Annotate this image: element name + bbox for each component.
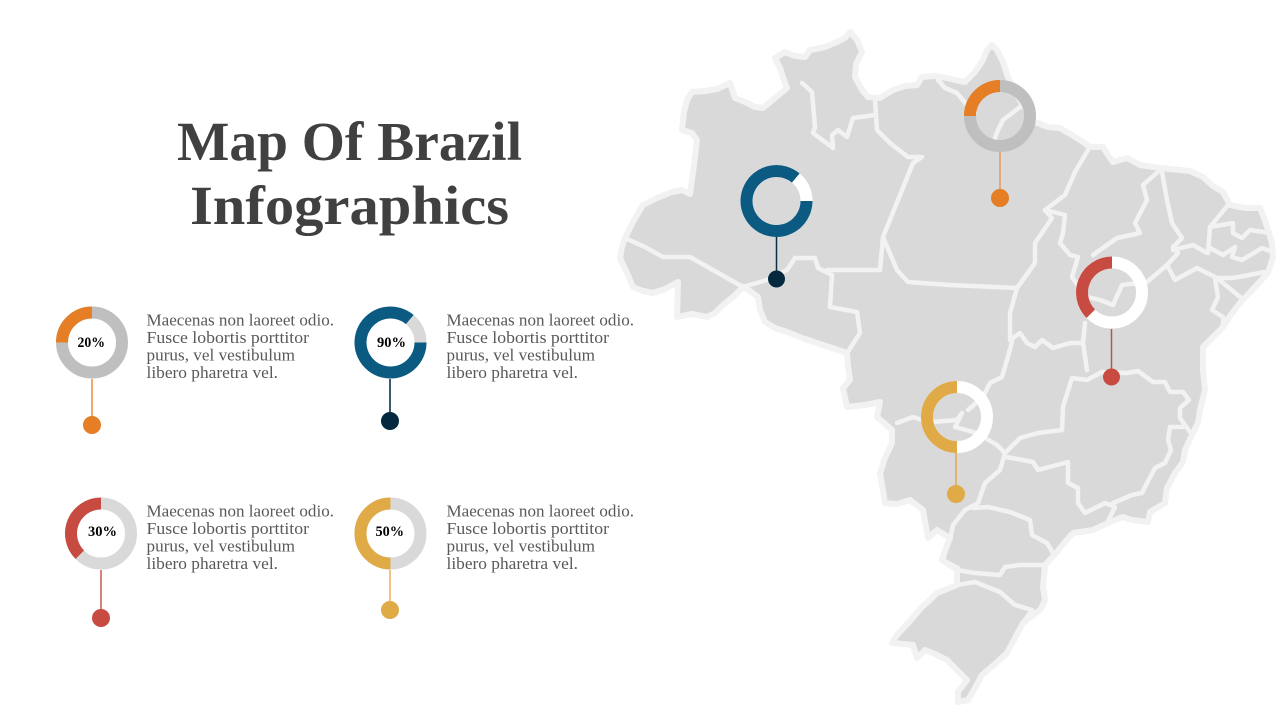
donut chart: 20% (62, 312, 122, 372)
pin: navy (381, 379, 399, 430)
text block: 30% description: Maecenas non laoreet odio. (146, 502, 334, 520)
percent label: 50%: 50% (376, 524, 404, 540)
panel: 30% stat (71, 502, 334, 627)
text block: 50% description: Maecenas non laoreet odio. (446, 502, 634, 520)
title: Map Of Brazil (177, 111, 522, 172)
panel: 50% stat (360, 502, 634, 619)
text block: 50% description: libero pharetra vel. (446, 554, 578, 573)
map donut: red (1082, 262, 1142, 322)
text block: 90% description: Maecenas non laoreet odio. (446, 310, 634, 330)
text block: 30% description: libero pharetra vel. (146, 554, 278, 573)
percent label: 90%: 90% (377, 335, 406, 351)
text block: 20% description (146, 310, 334, 382)
title: Infographics (190, 175, 509, 236)
percent label: 30%: 30% (88, 524, 117, 540)
map: state borders (625, 80, 1273, 623)
donut chart: 90% (360, 312, 420, 373)
text block: 50% description: Fusce lobortis porttitor (446, 519, 609, 538)
percent label: 20%: 20% (78, 335, 105, 351)
panel: 20% stat (62, 310, 334, 434)
text block: 50% description (446, 502, 634, 573)
text block: 20% description: Fusce lobortis porttitor (146, 328, 309, 347)
pin: orange (83, 379, 101, 434)
map pin: orange (991, 152, 1009, 207)
title (177, 111, 522, 236)
text block: 30% description: purus, vel vestibulum (146, 536, 295, 556)
text block: 20% description: Maecenas non laoreet odio. (146, 310, 334, 330)
map pin: red (1103, 329, 1120, 386)
map marker: blue donut (746, 171, 806, 288)
map marker: orange donut (970, 86, 1030, 207)
map donut: orange (970, 86, 1030, 146)
text block: 30% description (146, 502, 334, 573)
text block: 90% description: Fusce lobortis porttitor (446, 328, 609, 347)
map marker: red donut (1082, 262, 1142, 386)
text block: 90% description: libero pharetra vel. (446, 363, 578, 382)
map pin: navy (768, 237, 785, 288)
pin: yellow (381, 570, 399, 619)
map marker: yellow donut (927, 387, 987, 503)
pin: red (92, 570, 110, 627)
map: country outline (620, 32, 1273, 702)
map pin: yellow (947, 453, 965, 503)
map donut: blue (746, 171, 806, 231)
text block: 30% description: Fusce lobortis porttitor (146, 519, 309, 538)
map of Brazil (620, 32, 1273, 702)
panel: 90% stat (360, 310, 634, 430)
donut chart: 50% (360, 504, 420, 564)
map donut: yellow (927, 387, 987, 447)
text block: 20% description: purus, vel vestibulum (146, 346, 295, 364)
text block: 90% description (446, 310, 634, 382)
text block: 90% description: purus, vel vestibulum (446, 346, 595, 364)
text block: 50% description: purus, vel vestibulum (446, 536, 595, 556)
text block: 20% description: libero pharetra vel. (146, 363, 278, 382)
donut chart: 30% (71, 504, 131, 564)
